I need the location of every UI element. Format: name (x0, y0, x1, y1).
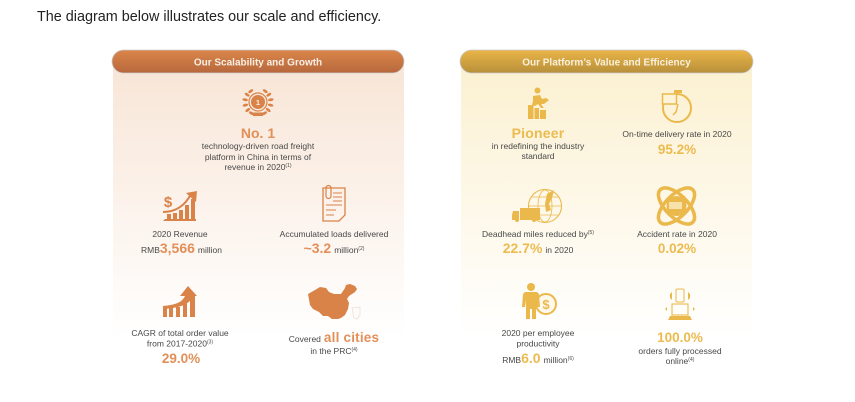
stat: pioneer (492, 125, 585, 161)
icon: stopwatch (662, 90, 691, 122)
icon: atom truck (652, 182, 701, 230)
stat: No. 1: No. 1 (241, 125, 275, 141)
stat: orders online: online (666, 356, 688, 366)
stat: orders online: 100.0% (657, 330, 703, 345)
icon: revenue chart: $ (164, 194, 173, 211)
stat: deadhead miles: Deadhead miles reduced by (482, 229, 588, 239)
panel: value and efficiency (460, 50, 753, 366)
stat: employee productivity: (6) (568, 356, 574, 362)
stat: accident rate: 0.02% (658, 241, 696, 256)
icon: document with paperclip (323, 186, 345, 221)
stat: deadhead miles: 22.7% in 2020 (503, 240, 574, 256)
stat: all cities: in the PRC (310, 346, 351, 356)
stat: pioneer: standard (521, 151, 555, 161)
stat: CAGR: (3) (207, 340, 213, 346)
stat: CAGR: CAGR of total order value (131, 328, 229, 338)
stat: No. 1 (202, 125, 315, 172)
icon: phone and laptop (665, 289, 695, 320)
stat: No. 1: revenue in 2020 (224, 162, 285, 172)
stat: 2020 revenue: RMB3,566 million (141, 240, 222, 256)
stat: deadhead miles (482, 229, 594, 256)
stat: on-time delivery (622, 129, 732, 157)
panel background (461, 60, 752, 338)
stat: employee productivity: productivity (516, 338, 560, 348)
stat: orders online: (4) (688, 357, 695, 363)
icon: China map (308, 284, 360, 319)
stat: No. 1: platform in China in terms of (205, 152, 312, 162)
stat: pioneer: in redefining the industry (492, 141, 585, 151)
stat: on-time delivery: On-time delivery rate in 2020 (622, 129, 732, 139)
icon: medal with laurel: 1 (256, 98, 260, 107)
title: The diagram below illustrates our scale and efficiency. (37, 9, 381, 25)
stat: deadhead miles: (5) (588, 230, 594, 236)
stat: orders online: orders fully processed (638, 346, 722, 356)
stat: all cities: (4) (351, 347, 358, 353)
stat: No. 1: technology-driven road freight (202, 141, 315, 151)
stat: employee productivity: RMB6.0 million (502, 350, 568, 366)
stat: accumulated loads: ~3.2 million (304, 240, 358, 256)
stat: No. 1: (1) (285, 163, 292, 169)
stat: employee productivity: 2020 per employee (502, 328, 575, 338)
stat: accumulated loads: (2) (358, 246, 365, 252)
stat: accumulated loads (280, 229, 389, 256)
stat: CAGR: from 2017-2020 (147, 338, 207, 348)
icon: truck and globe (512, 190, 562, 222)
icon: medal with laurel (242, 88, 274, 116)
panel header: Our Platform’s Value and Efficiency (522, 58, 691, 68)
panel header: Our Scalability and Growth (194, 58, 322, 68)
stat: orders online (638, 330, 722, 366)
stat: 2020 revenue (141, 229, 222, 256)
stat: on-time delivery: 95.2% (658, 142, 696, 157)
icon: employee with dollar: $ (542, 297, 550, 312)
stat: CAGR: 29.0% (162, 351, 200, 366)
icon: pioneer climbing steps (528, 88, 549, 119)
stat: pioneer: Pioneer (512, 125, 565, 141)
stat: 2020 revenue: 2020 Revenue (152, 229, 208, 239)
panel header (112, 50, 404, 73)
stat: accumulated loads: Accumulated loads delivered (280, 229, 389, 239)
stat: CAGR (131, 328, 229, 366)
stat: employee productivity (502, 328, 575, 366)
icon: revenue chart (163, 191, 197, 221)
stat: all cities: Coveredall cities (289, 330, 379, 345)
icon: employee with dollar (522, 283, 556, 319)
panel: scalability and growth (112, 50, 404, 366)
stat: accident rate (637, 229, 717, 256)
icon: growth arrow chart (163, 286, 197, 317)
stat: accident rate: Accident rate in 2020 (637, 229, 717, 239)
stat: all cities (289, 330, 379, 356)
panel background (113, 60, 404, 338)
panel header (460, 50, 753, 73)
